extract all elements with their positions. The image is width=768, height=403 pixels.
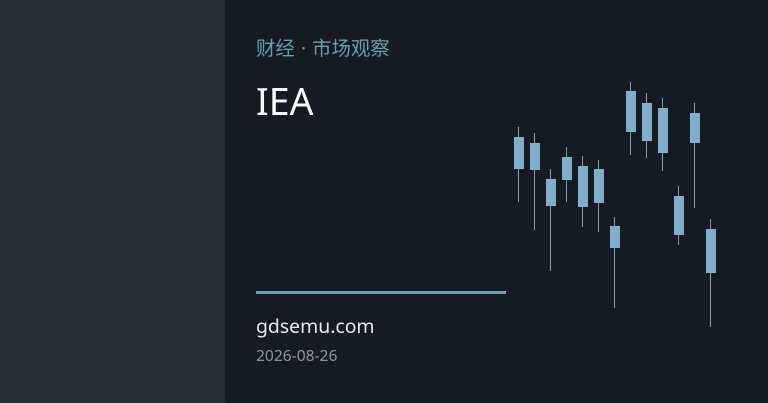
site name: gdsemu.com xyxy=(256,312,375,339)
title: IEA xyxy=(256,75,314,126)
accent line xyxy=(256,291,506,294)
category heading: 财经 · 市场观察 xyxy=(256,34,390,60)
left panel xyxy=(0,0,225,403)
date: 2026-08-26 xyxy=(256,344,337,366)
